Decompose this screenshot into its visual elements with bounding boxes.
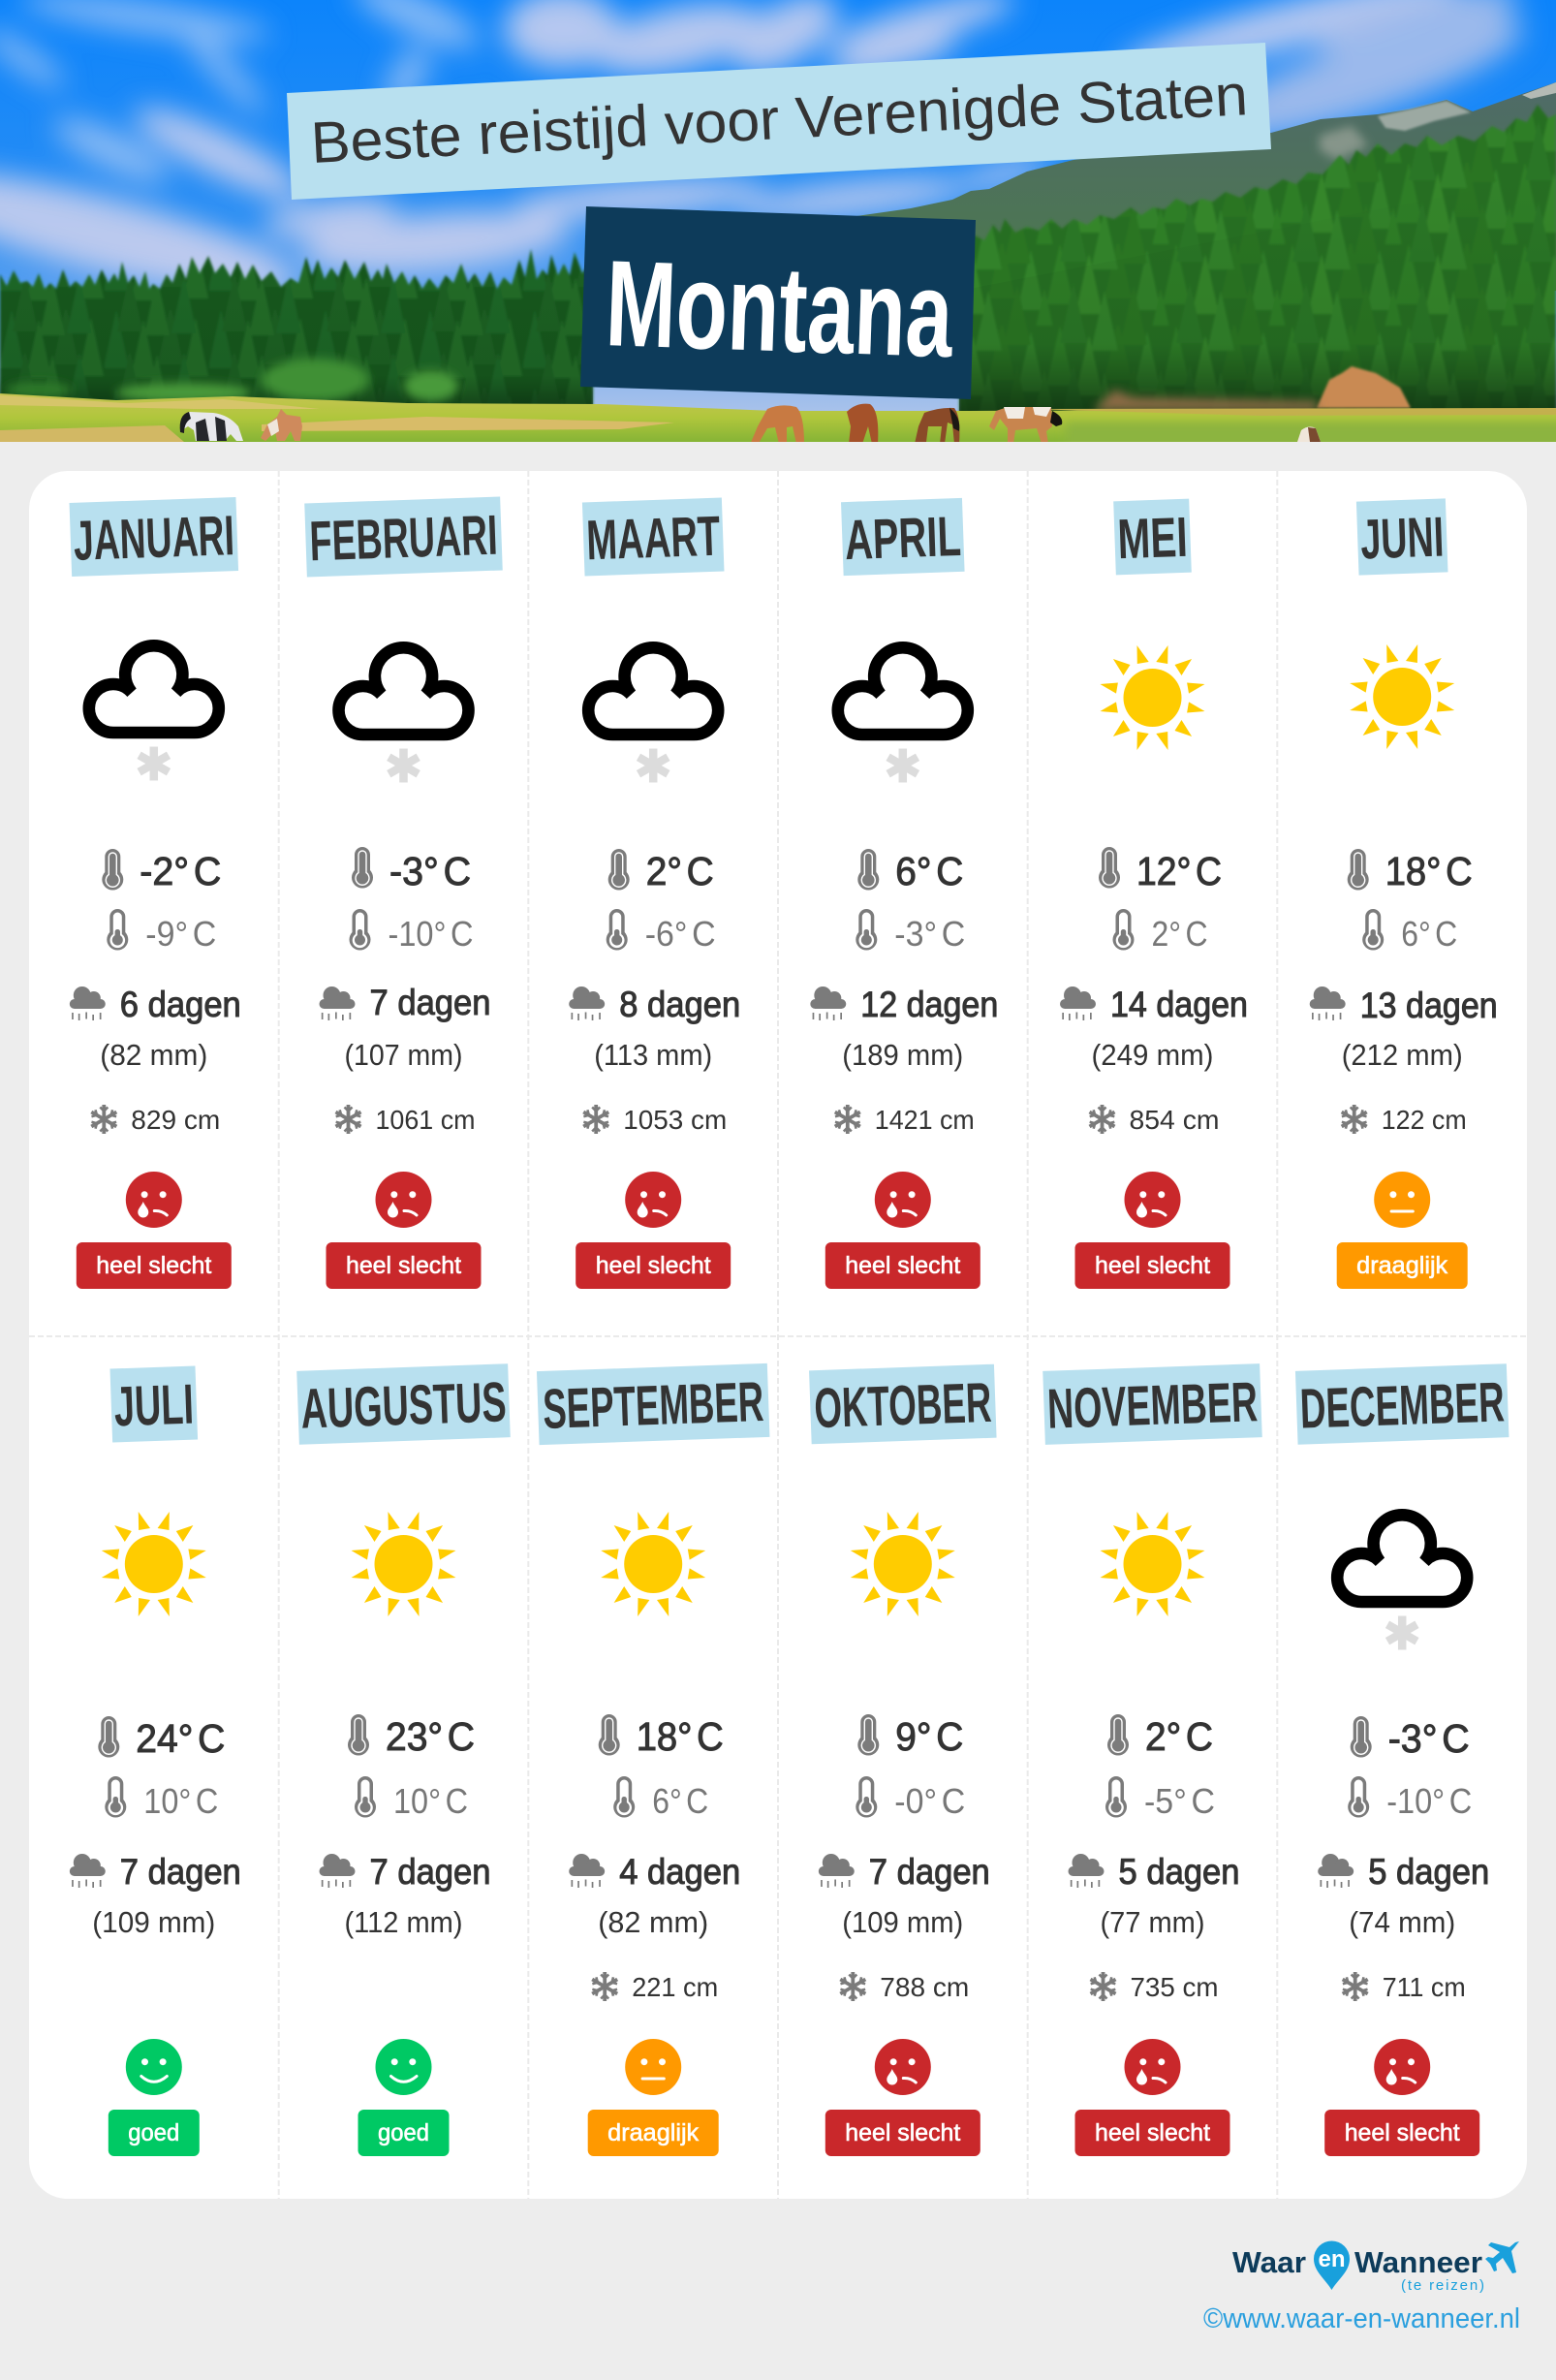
- rainfall: (249 mm): [1091, 1038, 1213, 1072]
- month label: OKTOBER: [813, 1371, 992, 1440]
- rating badge: [825, 2110, 980, 2156]
- rainfall: (112 mm): [345, 1905, 463, 1939]
- min temperature: 6°C: [652, 1781, 708, 1821]
- rating badge: [1075, 2110, 1230, 2156]
- max temperature: -2°C: [140, 849, 221, 893]
- rating badge: [825, 1242, 980, 1289]
- rating badge: [1337, 1242, 1468, 1289]
- min temperature: -3°C: [894, 914, 965, 954]
- rating badge: [109, 2110, 200, 2156]
- bushes: [5, 359, 458, 402]
- rain days: [569, 1852, 740, 1892]
- max temperature: [608, 849, 714, 893]
- rain days: 13 dagen: [1360, 986, 1498, 1025]
- snowfall: [1089, 1972, 1219, 2002]
- subtitle banner: [287, 43, 1271, 200]
- rating badge: draaglijk: [1356, 1252, 1448, 1279]
- month label: [809, 1364, 997, 1444]
- logo: Waar en Wanneer: Wanneer: [1354, 2245, 1482, 2279]
- logo: Waar en Wanneer: (te reizen): [1401, 2277, 1484, 2294]
- rainfall: (109 mm): [92, 1905, 215, 1939]
- month label: MEI: [1116, 506, 1189, 571]
- rain days: 6 dagen: [120, 985, 241, 1024]
- rating badge: [77, 1242, 232, 1289]
- max temperature: 6°C: [895, 849, 963, 893]
- rain days: [70, 1852, 241, 1892]
- icon: sad face: [376, 1172, 432, 1228]
- rain days: [1068, 1852, 1240, 1892]
- rating badge: [358, 2110, 450, 2156]
- icon: neutral face: [1374, 1172, 1430, 1228]
- month label: [537, 1363, 769, 1445]
- min temperature: [1112, 909, 1207, 954]
- icon: sad face: [1124, 1172, 1180, 1228]
- max temperature: [857, 849, 963, 893]
- min temperature: -5°C: [1144, 1781, 1215, 1821]
- min temperature: [105, 1776, 218, 1821]
- month: oktober: [809, 1364, 997, 2156]
- month label: [304, 496, 503, 578]
- max temperature: [352, 847, 471, 893]
- max temperature: 9°C: [895, 1714, 963, 1759]
- main white panel: [29, 471, 1527, 2199]
- snowfall: [89, 1105, 220, 1135]
- month: september: [537, 1363, 769, 2156]
- snowfall: [833, 1105, 975, 1135]
- min temperature: [856, 1776, 965, 1821]
- icon: airplane: [1485, 2241, 1519, 2273]
- max temperature: 2°C: [1145, 1714, 1213, 1759]
- rainfall: (82 mm): [100, 1038, 207, 1072]
- month label: [296, 1363, 511, 1445]
- rain days: [1310, 986, 1498, 1025]
- month: augustus: [296, 1363, 511, 2156]
- rain days: [320, 983, 490, 1022]
- min temperature: [107, 909, 216, 954]
- snowfall: [1341, 1972, 1466, 2002]
- month: maart: [569, 498, 740, 1289]
- month label: [1113, 499, 1192, 575]
- month: november: [1043, 1363, 1262, 2156]
- month: april: [810, 498, 998, 1289]
- min temperature: [349, 909, 473, 954]
- min temperature: -10°C: [1386, 1781, 1472, 1821]
- min temperature: 2°C: [1151, 914, 1207, 954]
- snowfall: 1053 cm: [623, 1105, 727, 1135]
- right forest: [959, 105, 1556, 417]
- header photo: mountain landscape with horses: [0, 0, 1556, 465]
- icon: sun: [851, 1512, 955, 1616]
- rain days: [569, 985, 740, 1024]
- icon: neutral face: [625, 2039, 681, 2095]
- min temperature: 6°C: [1401, 914, 1457, 954]
- max temperature: [1107, 1714, 1213, 1759]
- snowfall: 122 cm: [1382, 1105, 1467, 1135]
- rainfall: (113 mm): [594, 1038, 712, 1072]
- icon: sad face: [875, 1172, 931, 1228]
- rain days: [70, 985, 241, 1024]
- month label: [70, 497, 238, 577]
- icon: sun: [601, 1512, 705, 1616]
- rain days: [1318, 1852, 1489, 1892]
- snowfall: [590, 1972, 718, 2002]
- meadow: [0, 393, 1556, 442]
- max temperature: [599, 1714, 724, 1759]
- rain days: 7 dagen: [120, 1852, 241, 1892]
- rating badge: goed: [378, 2119, 429, 2146]
- month label: [841, 498, 965, 576]
- rating badge: heel slecht: [845, 1252, 960, 1279]
- icon: cloud with snow: [838, 647, 968, 783]
- rating badge: draaglijk: [607, 2119, 700, 2146]
- snowfall: 1061 cm: [376, 1105, 475, 1135]
- snowfall: 854 cm: [1130, 1105, 1219, 1135]
- min temperature: [1105, 1776, 1215, 1821]
- month: mei: [1060, 499, 1248, 1289]
- rainfall: (109 mm): [842, 1905, 963, 1939]
- min temperature: -0°C: [894, 1781, 965, 1821]
- icon: sun: [1101, 1512, 1205, 1616]
- month label: JUNI: [1359, 506, 1445, 571]
- month: februari: [304, 496, 503, 1289]
- month: juni: [1310, 498, 1498, 1289]
- rating badge: heel slecht: [1345, 2119, 1460, 2146]
- logo: Waar en Wanneer: Waar: [1232, 2245, 1306, 2279]
- min temperature: 10°C: [143, 1781, 218, 1821]
- rain days: [1060, 985, 1248, 1024]
- month label: [1356, 498, 1447, 576]
- max temperature: [348, 1714, 475, 1759]
- month label: JANUARI: [73, 504, 235, 573]
- month: juli: [70, 1365, 241, 2156]
- rain days: 12 dagen: [860, 985, 998, 1024]
- rating badge: heel slecht: [96, 1252, 211, 1279]
- rating badge: [1075, 1242, 1230, 1289]
- rainfall: (107 mm): [345, 1038, 463, 1072]
- eroded bank: [1317, 366, 1411, 408]
- max temperature: 18°C: [637, 1714, 724, 1759]
- rating badge: [576, 1242, 731, 1289]
- icon: sad face: [1374, 2039, 1430, 2095]
- month label: FEBRUARI: [308, 504, 499, 573]
- icon: sun: [1101, 645, 1205, 750]
- max temperature: 2°C: [646, 849, 714, 893]
- icon: sad face: [126, 1172, 182, 1228]
- min temperature: [613, 1776, 708, 1821]
- icon: sun: [351, 1512, 455, 1616]
- max temperature: 18°C: [1385, 849, 1473, 893]
- icon: cloud with snow: [1337, 1515, 1467, 1649]
- rating badge: heel slecht: [1095, 1252, 1210, 1279]
- rain days: 14 dagen: [1110, 985, 1248, 1024]
- icon: cloud with snow: [588, 647, 718, 783]
- max temperature: 24°C: [136, 1716, 225, 1761]
- min temperature: 10°C: [393, 1781, 468, 1821]
- rain days: 7 dagen: [869, 1852, 990, 1892]
- min temperature: -10°C: [388, 914, 473, 954]
- month label: AUGUSTUS: [299, 1370, 508, 1441]
- max temperature: 23°C: [386, 1714, 475, 1759]
- min temperature: -6°C: [645, 914, 716, 954]
- rainfall: (74 mm): [1349, 1905, 1455, 1939]
- rating badge: heel slecht: [596, 1252, 711, 1279]
- max temperature: [1351, 1716, 1470, 1761]
- website url: ©www.waar-en-wanneer.nl: [1203, 2303, 1520, 2334]
- month label: JULI: [113, 1373, 195, 1438]
- rating badge: [326, 1242, 481, 1289]
- snowfall: 221 cm: [632, 1972, 718, 2002]
- icon: sun: [1350, 644, 1454, 749]
- rating badge: heel slecht: [346, 1252, 461, 1279]
- icon: sad face: [625, 1172, 681, 1228]
- rating badge: goed: [128, 2119, 179, 2146]
- rainfall: (189 mm): [842, 1038, 963, 1072]
- month label: NOVEMBER: [1046, 1370, 1259, 1441]
- icon: map pin: [1314, 2240, 1350, 2290]
- rainfall: (82 mm): [598, 1905, 708, 1939]
- month: januari: [70, 497, 241, 1289]
- rainfall: (212 mm): [1342, 1038, 1463, 1072]
- max temperature: [857, 1714, 963, 1759]
- month label: MAART: [585, 505, 721, 572]
- horses: [180, 404, 1321, 445]
- logo: Waar en Wanneer: en: [1318, 2246, 1345, 2272]
- rain days: [819, 1852, 990, 1892]
- icon: happy face: [126, 2039, 182, 2095]
- max temperature: [1099, 847, 1222, 893]
- icon: sun: [102, 1512, 206, 1616]
- rain days: [320, 1852, 490, 1892]
- snowfall: [1088, 1105, 1219, 1135]
- snowfall: [1340, 1105, 1467, 1135]
- rain days: 7 dagen: [370, 1852, 490, 1892]
- min temperature: -9°C: [145, 914, 216, 954]
- icon: cloud with snow: [339, 647, 469, 783]
- icon: sad face: [875, 2039, 931, 2095]
- icon: cloud with snow: [89, 645, 219, 781]
- month label: APRIL: [844, 505, 962, 572]
- rain days: 8 dagen: [619, 985, 740, 1024]
- max temperature: 12°C: [1136, 849, 1222, 893]
- snowfall: 735 cm: [1130, 1972, 1219, 2002]
- subtitle text: Beste reistijd voor Verenigde Staten: [309, 62, 1249, 175]
- rain days: 7 dagen: [370, 983, 490, 1022]
- icon: happy face: [376, 2039, 432, 2095]
- rain days: [810, 985, 998, 1024]
- max temperature: -3°C: [1388, 1716, 1470, 1761]
- title banner: [580, 206, 976, 399]
- max temperature: [98, 1716, 225, 1761]
- rain days: 4 dagen: [619, 1852, 740, 1892]
- max temperature: [1348, 849, 1473, 893]
- rating badge: heel slecht: [1095, 2119, 1210, 2146]
- title: Montana: [604, 235, 955, 383]
- min temperature: [856, 909, 965, 954]
- mountain: [843, 82, 1556, 291]
- max temperature: [102, 849, 221, 893]
- snowfall: 829 cm: [131, 1105, 220, 1135]
- min temperature: [607, 909, 716, 954]
- snowfall: [838, 1972, 969, 2002]
- logo: Waar en Wanneer: [1232, 2240, 1519, 2294]
- month label: [1043, 1363, 1262, 1445]
- snowfall: 788 cm: [880, 1972, 969, 2002]
- icon: sad face: [1124, 2039, 1180, 2095]
- min temperature: [1362, 909, 1457, 954]
- month label: [582, 498, 724, 576]
- month label: SEPTEMBER: [542, 1370, 764, 1441]
- rain days: 5 dagen: [1368, 1852, 1489, 1892]
- rain days: 5 dagen: [1118, 1852, 1240, 1892]
- snowfall: 1421 cm: [875, 1105, 975, 1135]
- month: december: [1295, 1363, 1509, 2156]
- snowfall: 711 cm: [1383, 1972, 1466, 2002]
- left forest: [0, 249, 593, 417]
- min temperature: [1348, 1776, 1472, 1821]
- snowfall: [334, 1105, 475, 1135]
- rating badge: heel slecht: [845, 2119, 960, 2146]
- rating badge: [588, 2110, 719, 2156]
- max temperature: -3°C: [389, 849, 471, 893]
- min temperature: [355, 1776, 468, 1821]
- rainfall: (77 mm): [1101, 1905, 1205, 1939]
- month label: [110, 1365, 198, 1443]
- rating badge: [1324, 2110, 1479, 2156]
- snowy peak rock: [1378, 101, 1471, 131]
